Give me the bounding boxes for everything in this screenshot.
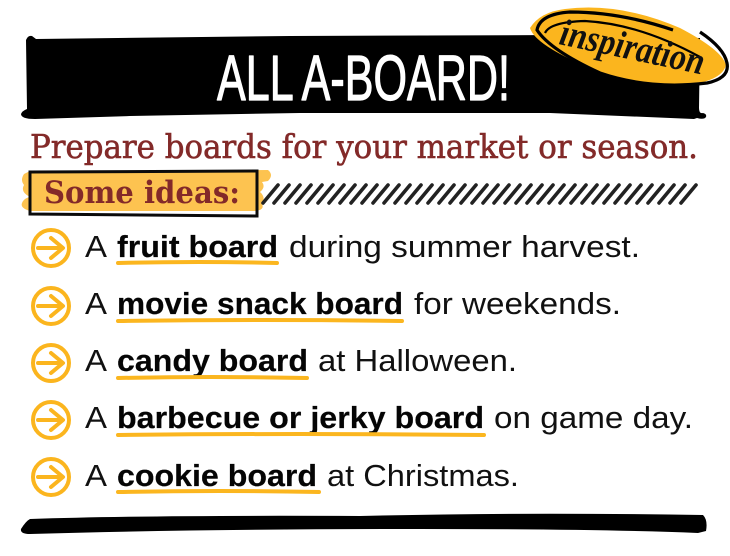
list item: cookie board: at Christmas. <box>327 458 519 493</box>
list item: movie snack board <box>33 286 621 324</box>
list item: candy board: candy board <box>117 343 308 378</box>
list item: cookie board <box>33 458 519 495</box>
list item: movie snack board: for weekends. <box>414 286 621 321</box>
list item: barbecue or jerky board: A <box>85 400 107 435</box>
hatched rule <box>263 185 696 203</box>
list item: barbecue or jerky board <box>33 400 693 438</box>
list item: cookie board: cookie board <box>117 458 317 493</box>
highlighter swash <box>22 170 271 211</box>
list item: cookie board: A <box>85 458 107 493</box>
list item: candy board: A <box>85 343 107 378</box>
badge: inspiration <box>530 8 727 86</box>
some ideas label <box>22 170 271 216</box>
list item: candy board <box>33 343 517 381</box>
label text: Some ideas: <box>44 175 240 211</box>
list item: barbecue or jerky board: barbecue or jerky board <box>117 400 484 435</box>
box outline <box>30 171 257 216</box>
list item: fruit board: during summer harvest. <box>289 229 640 264</box>
list item: candy board: at Halloween. <box>318 343 517 378</box>
list item: barbecue or jerky board: on game day. <box>494 400 693 435</box>
list item: movie snack board: A <box>85 286 107 321</box>
badge text: inspiration <box>556 12 709 83</box>
list item: fruit board: A <box>85 229 107 264</box>
subheading: Prepare boards for your market or season. <box>30 127 698 166</box>
bottom brush bar <box>21 514 707 534</box>
list item: fruit board: fruit board <box>117 229 278 264</box>
title text: ALL A-BOARD! <box>217 42 510 114</box>
title banner <box>21 35 706 119</box>
list item: movie snack board: movie snack board <box>117 286 403 321</box>
list item: fruit board <box>33 229 640 266</box>
